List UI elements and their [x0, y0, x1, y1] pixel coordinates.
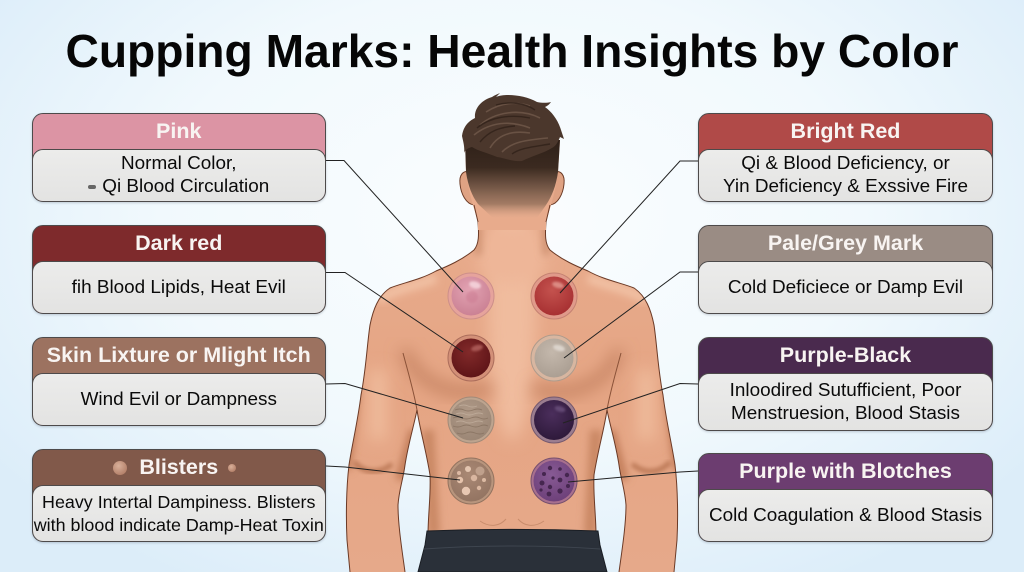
heading: pink: Pink [156, 119, 201, 143]
text: purple black description: Menstruesion, Blood Stasis [731, 403, 960, 424]
shaved fade [465, 140, 560, 218]
cup mark: skin texture [448, 397, 494, 443]
text: pink description: Normal Color, [121, 153, 236, 174]
heading: purple with blotches: Purple with Blotches [739, 459, 952, 483]
text: bright red description [698, 148, 993, 202]
text: blisters description [32, 485, 326, 542]
connector: pink [326, 160, 463, 292]
cup mark: blisters [448, 458, 494, 504]
title: Cupping Marks: Health Insights by Color [65, 25, 958, 77]
text: purple with blotches description [698, 488, 993, 542]
panel: skin texture [32, 337, 326, 426]
panel: pink [32, 113, 326, 202]
cup mark: purple black [531, 397, 577, 443]
trousers [418, 530, 607, 572]
text: blisters description: Heavy Intertal Dampiness. Blisters [42, 492, 315, 512]
icon: right ear [548, 172, 564, 205]
icon: left ear [460, 172, 476, 205]
connector: blisters [326, 466, 460, 480]
hair [462, 93, 564, 161]
heading: pale grey: Pale/Grey Mark [768, 231, 923, 255]
connector: skin texture [326, 384, 463, 418]
cup mark: pale grey [531, 335, 577, 381]
connector: purple with blotches [568, 471, 698, 482]
text: dark red description [32, 260, 326, 314]
connector: pale grey [564, 272, 698, 358]
heading: bright red: Bright Red [791, 119, 900, 143]
panel: bright red [698, 113, 993, 202]
heading: skin texture: Skin Lixture or Mlight Itch [47, 343, 311, 367]
panel: blisters [32, 449, 326, 542]
heading: dark red: Dark red [135, 231, 222, 255]
panel: purple black [698, 337, 993, 431]
text: pale grey description [698, 260, 993, 314]
text: purple black description: Inloodired Sutufficient, Poor [730, 380, 961, 401]
icon: small blister [228, 464, 236, 472]
text: bright red description: Yin Deficiency & Exssive Fire [723, 176, 968, 197]
heading: purple black: Purple-Black [780, 343, 911, 367]
panel: dark red [32, 225, 326, 314]
cup mark: purple with blotches [531, 458, 577, 504]
torso and arms [346, 222, 678, 572]
cup mark: bright red [531, 273, 577, 319]
cup mark: dark red [448, 335, 494, 381]
heading: blisters: Blisters [139, 455, 218, 479]
text: skin texture description: Wind Evil or Dampness [81, 388, 277, 410]
connector: bright red [560, 161, 698, 293]
panel: purple with blotches [698, 453, 993, 542]
text: blisters description: with blood indicate Damp-Heat Toxin [34, 514, 324, 534]
text: pink description: Qi Blood Circulation [102, 176, 269, 197]
text: skin texture description [32, 372, 326, 426]
connector: purple black [563, 384, 698, 423]
neck base [465, 140, 560, 230]
text: bright red description: Qi & Blood Deficiency, or [741, 153, 950, 174]
text: purple black description [698, 373, 993, 431]
icon: large blister [112, 461, 126, 475]
text: purple with blotches description: Cold Coagulation & Blood Stasis [709, 504, 982, 526]
head and neck [460, 93, 564, 230]
text: pink description [32, 148, 326, 202]
cup mark: pink [448, 273, 494, 319]
text: dark red description: fih Blood Lipids, Heat Evil [72, 276, 286, 298]
back figure illustration [326, 93, 698, 572]
panel: pale grey [698, 225, 993, 314]
connector: dark red [326, 272, 463, 352]
neck outline [474, 205, 550, 222]
text: pale grey description: Cold Deficiece or Damp Evil [728, 277, 963, 298]
